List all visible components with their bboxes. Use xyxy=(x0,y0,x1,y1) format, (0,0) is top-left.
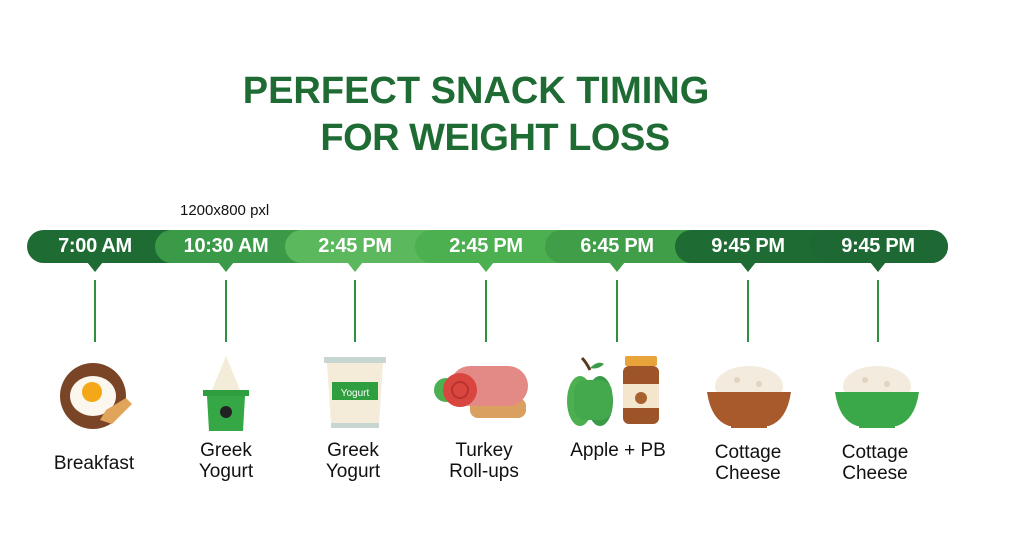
icon: egg breakfast xyxy=(60,363,132,429)
label: Greek Yogurt 2: Greek xyxy=(327,440,379,461)
time labels: 7:00 AM xyxy=(58,235,132,257)
icon: cottage cheese green xyxy=(835,366,919,428)
title: FOR WEIGHT LOSS xyxy=(320,117,670,159)
icon: apple + PB xyxy=(567,356,659,426)
timeline bar: 2:45 PM xyxy=(318,235,392,257)
timeline bar: 6:45 PM xyxy=(580,235,654,257)
size note: 1200x800 pxl xyxy=(180,202,269,219)
timeline bar: 2:45 PM xyxy=(449,235,523,257)
label: Turkey Roll-ups: Roll-ups xyxy=(449,461,519,482)
label: Breakfast: Breakfast xyxy=(54,453,134,474)
label: Cottage Cheese 2: Cheese xyxy=(842,463,908,484)
label: Greek Yogurt 2: Yogurt xyxy=(326,461,380,482)
timeline bar: 10:30 AM xyxy=(184,235,268,257)
icon: yogurt tub xyxy=(324,357,386,428)
title xyxy=(243,70,709,159)
icon: cottage cheese brown xyxy=(707,366,791,428)
icon: yogurt tub: Yogurt xyxy=(341,388,369,399)
title: PERFECT SNACK TIMING xyxy=(243,70,709,112)
timeline bar: 9:45 PM xyxy=(841,235,915,257)
label: Cottage Cheese xyxy=(715,442,781,484)
icon: greek yogurt cup xyxy=(203,356,249,431)
timeline bar: 9:45 PM xyxy=(711,235,785,257)
label: Cottage Cheese: Cheese xyxy=(715,463,781,484)
label: Turkey Roll-ups: Turkey xyxy=(455,440,513,461)
label: Greek Yogurt: Greek xyxy=(200,440,252,461)
label: Apple + PB: Apple + PB xyxy=(570,440,666,461)
label: Greek Yogurt xyxy=(199,440,253,482)
label: Turkey Roll-ups xyxy=(449,440,519,482)
label: Cottage Cheese 2 xyxy=(842,442,908,484)
label: Cottage Cheese 2: Cottage xyxy=(842,442,908,463)
timeline bar xyxy=(27,230,948,272)
label: Greek Yogurt 2 xyxy=(326,440,380,482)
label: Greek Yogurt: Yogurt xyxy=(199,461,253,482)
label: Cottage Cheese: Cottage xyxy=(715,442,781,463)
icon: turkey roll-ups xyxy=(434,366,528,418)
